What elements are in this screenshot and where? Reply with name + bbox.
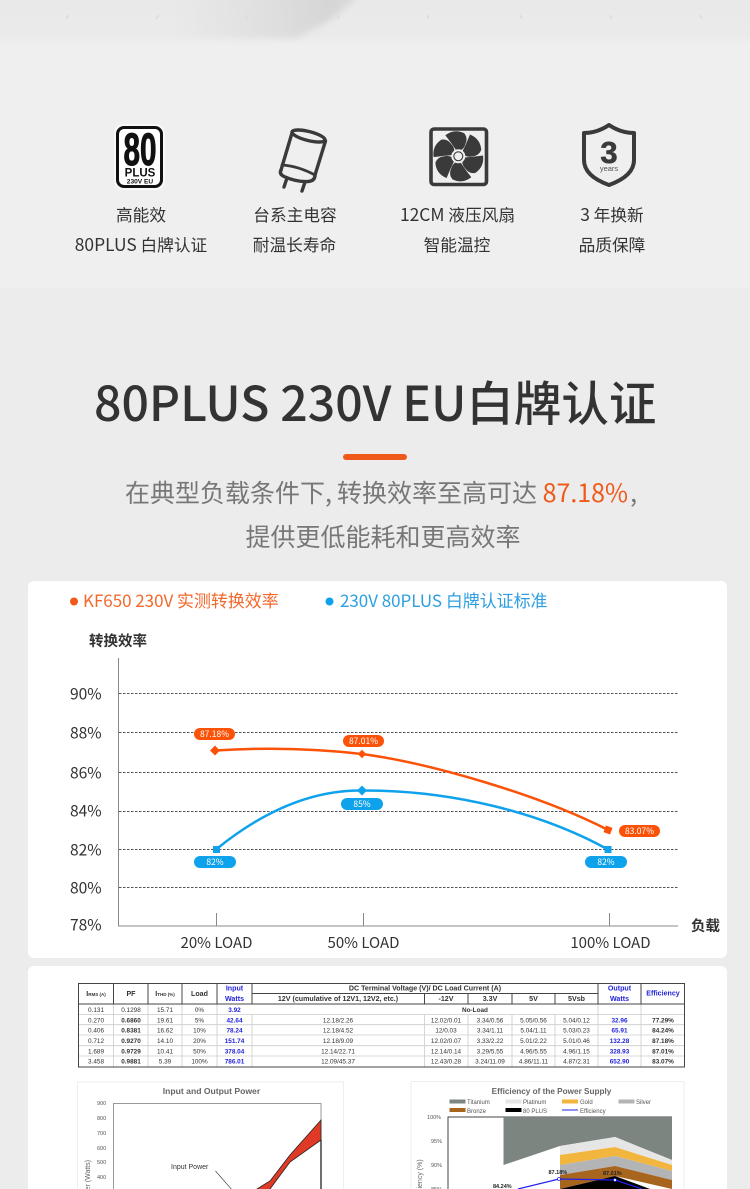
table: load test data: 42.64 <box>226 1017 243 1024</box>
table: load test data: 65.91 <box>612 1028 628 1035</box>
label: 3 year replacement: 3 年换新 <box>580 202 644 227</box>
table: load test data: 10% <box>193 1028 206 1035</box>
table: load test data: 16.62 <box>157 1028 173 1035</box>
table: load test data: 4.86/11.11 <box>519 1059 549 1066</box>
table: load test data: 100% <box>191 1059 208 1066</box>
table: load test data: 0.712 <box>88 1038 104 1045</box>
table: load test data: 12V (cumulative of 12V1, 12V2, etc.) <box>278 995 399 1003</box>
legend: Silver <box>636 1100 651 1106</box>
table: load test data: 77.29% <box>652 1017 674 1024</box>
tick labels: 95% <box>431 1139 442 1145</box>
y axis labels: 82% <box>70 838 102 860</box>
table: load test data: 4.96/1.15 <box>563 1048 590 1055</box>
table: load test data: 12.18/2.26 <box>323 1017 354 1024</box>
y axis labels <box>70 682 102 936</box>
table: load test data: 12.18/4.52 <box>323 1028 354 1035</box>
table: load test data: 5.03/0.23 <box>563 1028 590 1035</box>
table: load test data: 3.24/11.09 <box>475 1059 505 1066</box>
tick labels: 500 <box>97 1160 106 1166</box>
table: load test data: PF <box>126 990 136 998</box>
table: load test data: 5% <box>195 1017 204 1024</box>
pill: 85% <box>341 798 383 810</box>
table: load test data: 0.270 <box>88 1017 104 1024</box>
table: load test data: Watts <box>610 995 629 1003</box>
feature: warranty <box>579 125 645 256</box>
table: load test data: 3.33/2.22 <box>477 1038 504 1045</box>
label: 80PLUS white: 80PLUS 白牌认证 <box>75 232 208 257</box>
table: load test data: 12/0.03 <box>435 1028 457 1035</box>
legend <box>450 1100 651 1115</box>
table: load test data: 3.29/5.55 <box>477 1048 504 1055</box>
callout: input power <box>171 1164 233 1189</box>
tick labels: 900 <box>97 1101 106 1107</box>
efficiency line <box>518 1178 642 1189</box>
legend: KF650 measured: KF650 230V 实测转换效率 <box>83 587 279 612</box>
table: load test data: 20% <box>193 1038 206 1045</box>
tick labels: 700 <box>97 1131 106 1137</box>
legend: Platinum <box>523 1100 546 1106</box>
plot frame <box>114 1104 321 1189</box>
table: load test data: 0.9729 <box>121 1048 141 1055</box>
pill: 82% at 100% load <box>585 856 627 868</box>
table: load test data: 15.71 <box>157 1007 173 1014</box>
table: load test data: Watts <box>225 995 244 1003</box>
table: load test data: 0.9270 <box>121 1038 141 1045</box>
table: load test data: 0.131 <box>88 1007 104 1014</box>
chart: input and output power <box>78 1082 344 1189</box>
table: load test data: 32.96 <box>612 1017 628 1024</box>
line: measured efficiency <box>210 746 612 834</box>
table: load test data: -12V <box>439 995 454 1003</box>
table: load test data: 0.9881 <box>121 1059 141 1066</box>
tick labels: 800 <box>97 1116 106 1122</box>
table: load test data: 5.01/2.22 <box>520 1038 547 1045</box>
table: load test data: Output <box>608 984 632 992</box>
x label: 50% load: 50% LOAD <box>328 932 399 953</box>
data labels <box>493 1170 622 1189</box>
table: load test data: 5.04/0.12 <box>563 1017 590 1024</box>
y axis labels: 90% <box>70 682 102 704</box>
pill: 82% at 20% load: 82% <box>206 856 224 868</box>
table: load test data: 3.34/0.56 <box>477 1017 504 1024</box>
legend: 230V 80PLUS standard: 230V 80PLUS 白牌认证标准 <box>340 587 548 612</box>
tick labels <box>97 1101 106 1181</box>
label: smart temperature control: 智能温控 <box>424 232 491 256</box>
table: load test data: 12.02/0.07 <box>431 1038 462 1045</box>
feature: Taiwanese capacitor <box>253 128 337 256</box>
table: load test data: 12.02/0.01 <box>431 1017 462 1024</box>
table: load test data: No-Load <box>462 1007 488 1014</box>
panel: test report <box>28 966 727 1189</box>
chart title: Efficiency of the Power Supply <box>492 1087 612 1096</box>
subtitle line 2: 提供更低能耗和更高效率 <box>245 518 521 554</box>
table: load test data: 4.87/2.31 <box>563 1059 590 1066</box>
table: load test data: 5.39 <box>159 1059 172 1066</box>
pill: 85%: 85% <box>353 798 371 810</box>
y axis labels: 84% <box>70 800 102 822</box>
icon: 80 PLUS badge: 80 <box>123 125 157 176</box>
table: load test data: 12.14/0.14 <box>431 1048 462 1055</box>
table: load test data: 50% <box>193 1048 206 1055</box>
accent bar <box>343 454 407 460</box>
icon: 3 year shield: years <box>600 164 618 173</box>
table: load test data: 0.1298 <box>121 1007 141 1014</box>
table: load test data: 132.28 <box>610 1038 630 1045</box>
table: load test data: 0% <box>195 1007 204 1014</box>
table: load test data: 19.61 <box>157 1017 173 1024</box>
plot frame <box>448 1117 672 1189</box>
axes <box>118 658 678 926</box>
y axis labels: 88% <box>70 722 102 744</box>
label: quality assurance: 品质保障 <box>579 232 645 256</box>
pill: 83.07%: 83.07% <box>625 825 654 837</box>
table: load test data: 328.93 <box>610 1048 630 1055</box>
table: load test data: ITHD (%) <box>155 990 175 998</box>
table: load test data: 3.92 <box>228 1007 241 1014</box>
label: 12CM fan: 12CM 液压风扇 <box>400 202 515 227</box>
table: load test data: 10.41 <box>157 1048 173 1055</box>
table: load test data: Input <box>226 984 244 992</box>
y axis labels: 80% <box>70 876 102 898</box>
table: load test data: 3.34/1.11 <box>477 1028 504 1035</box>
x label: 100% load: 100% LOAD <box>570 932 651 953</box>
icon: 3 year shield <box>584 125 634 185</box>
tick labels: 90% <box>431 1163 442 1169</box>
subtitle line 1: 在典型负载条件下,转换效率至高可达 87.18%, <box>125 474 637 510</box>
line: 80PLUS standard <box>213 786 612 853</box>
chart: efficiency of the power supply <box>411 1082 684 1189</box>
table: load test data: 12.09/45.37 <box>321 1059 355 1066</box>
table: load test data: 5.05/0.56 <box>520 1017 547 1024</box>
table: load test data: 151.74 <box>225 1038 245 1045</box>
table: load test data: 3.458 <box>88 1059 104 1066</box>
legend: 80 PLUS <box>523 1109 547 1115</box>
x label: 20% load: 20% LOAD <box>181 932 252 953</box>
data labels: 87.01% <box>603 1171 622 1177</box>
table: load test data: IRMS (A) <box>86 990 106 998</box>
table: load test data: 0.6860 <box>121 1017 141 1024</box>
icon: 80 PLUS badge: PLUS <box>125 168 156 180</box>
data labels: 87.18% <box>548 1170 567 1176</box>
table: load test data: 12.14/22.71 <box>321 1048 355 1055</box>
label: capacitor: 台系主电容 <box>253 202 337 226</box>
legend: Gold <box>580 1100 593 1106</box>
label: high efficiency: 高能效 <box>116 202 166 226</box>
tick labels <box>427 1115 442 1189</box>
icon: capacitor <box>280 128 326 191</box>
panel: efficiency chart <box>28 581 727 958</box>
table: load test data: 4.96/5.55 <box>520 1048 547 1055</box>
table: load test data: 83.07% <box>652 1059 674 1066</box>
table: load test data: 652.90 <box>610 1059 630 1066</box>
heading: 80PLUS 230V EU白牌认证 <box>94 365 656 435</box>
table: load test data: Efficiency <box>646 990 680 998</box>
table: load test data: 87.18% <box>652 1038 674 1045</box>
table: load test data: Load <box>191 990 208 998</box>
table: load test data: 5.01/0.46 <box>563 1038 590 1045</box>
chart title: Input and Output Power <box>163 1086 261 1096</box>
table: load test data: 5.04/1.11 <box>520 1028 547 1035</box>
efficiency bands <box>504 1117 672 1189</box>
subtitle <box>125 474 637 554</box>
tick labels: 600 <box>97 1146 106 1152</box>
table: load test data: 786.01 <box>225 1059 245 1066</box>
x axis title: 负载 <box>691 915 720 936</box>
table: load test data: 12.18/9.09 <box>323 1038 354 1045</box>
table: load test data: 1.689 <box>88 1048 104 1055</box>
feature: fan <box>400 129 515 256</box>
icon: 80 PLUS badge: 230V EU <box>127 178 153 186</box>
table: load test data <box>78 983 685 1067</box>
table: load test data: 5Vsb <box>568 995 586 1003</box>
pill: 82% at 100% load: 82% <box>597 856 615 868</box>
icon: fan <box>430 129 487 184</box>
tick labels: 100% <box>427 1115 441 1121</box>
table: load test data: 12.43/0.28 <box>431 1059 462 1066</box>
feature: 80PLUS certification <box>75 124 208 257</box>
legend: Efficiency <box>580 1109 606 1115</box>
legend: Titanium <box>467 1100 490 1106</box>
table: load test data: 84.24% <box>652 1028 674 1035</box>
legend: Bronze <box>467 1109 487 1115</box>
red band between input and output <box>250 1120 321 1189</box>
y axis labels: 86% <box>70 762 102 784</box>
callout: input power: Input Power <box>171 1164 209 1171</box>
table: load test data: 378.04 <box>225 1048 245 1055</box>
y axis title: 转换效率 <box>89 630 147 651</box>
label: long life: 耐温长寿命 <box>253 232 337 256</box>
pill: 87.01%: 87.01% <box>349 735 378 747</box>
table: load test data: 78.24 <box>226 1028 243 1035</box>
icon: 3 year shield: 3 <box>600 135 618 170</box>
icon: 80 PLUS badge <box>114 124 165 190</box>
pill: 82% at 20% load <box>194 856 236 868</box>
features band background <box>66 0 702 38</box>
y axis labels: 78% <box>70 914 102 936</box>
table: load test data: 0.8381 <box>121 1028 141 1035</box>
table: load test data: DC Terminal Voltage (V)/ DC Load Current (A) <box>349 984 502 992</box>
table: load test data: 0.406 <box>88 1028 104 1035</box>
pill: 87.18%: 87.18% <box>200 728 229 740</box>
table: load test data: 14.10 <box>157 1038 173 1045</box>
table: load test data: 3.3V <box>483 995 498 1003</box>
tick labels: 400 <box>97 1175 106 1181</box>
table: load test data: 5V <box>529 995 538 1003</box>
table: load test data: 87.01% <box>652 1048 674 1055</box>
